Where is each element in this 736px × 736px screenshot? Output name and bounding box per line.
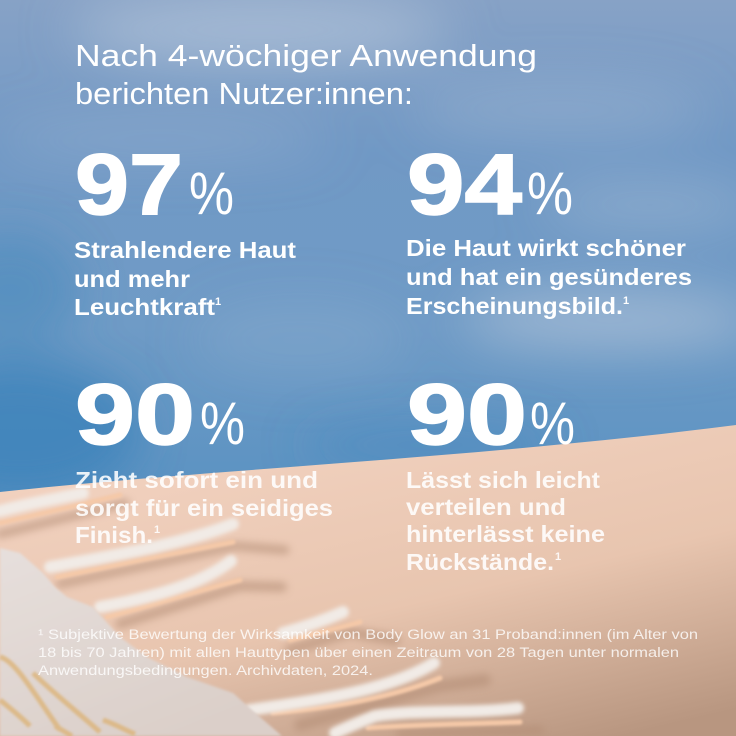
stat: 97%: % xyxy=(189,160,234,227)
background: sand xyxy=(0,425,736,736)
stat: 97%: und mehr xyxy=(74,266,190,292)
background: sky xyxy=(0,0,736,500)
stat: 94%: 94 xyxy=(407,137,522,233)
stat: 94% xyxy=(406,137,692,319)
stat: 90% right: 1 xyxy=(555,551,561,563)
stat: 90% right: 90 xyxy=(407,367,527,463)
stat: 94%: Erscheinungsbild. xyxy=(406,293,623,319)
stat: 90% left: sorgt für ein seidiges xyxy=(75,495,333,521)
stat: 90% right: hinterlässt keine xyxy=(406,521,605,547)
towel xyxy=(0,548,282,736)
stat: 90% right: verteilen und xyxy=(406,494,566,520)
heading: Nach 4-wöchiger Anwendung xyxy=(75,38,537,73)
stat: 90% left: Finish. xyxy=(75,522,153,548)
stat: 97%: 1 xyxy=(215,296,221,308)
stat: 90% left xyxy=(75,367,333,548)
stat: 90% left: % xyxy=(200,390,245,457)
footnote: 18 bis 70 Jahren) mit allen Hauttypen über einen Zeitraum von 28 Tagen unter normalen xyxy=(38,645,679,660)
stat: 97%: 97 xyxy=(75,137,183,233)
stat: 97%: Strahlendere Haut xyxy=(74,237,296,263)
towel fringe xyxy=(0,493,520,733)
stat: 94%: 1 xyxy=(623,295,629,307)
stat: 97%: Leuchtkraft xyxy=(74,294,215,320)
footnote: Anwendungsbedingungen. Archivdaten, 2024. xyxy=(38,663,373,678)
stat: 90% right: % xyxy=(530,390,575,457)
stat: 94%: Die Haut wirkt schöner xyxy=(406,235,686,261)
stat: 94%: und hat ein gesünderes xyxy=(406,264,692,290)
stat: 90% left: 90 xyxy=(75,367,195,463)
heading: berichten Nutzer:innen: xyxy=(75,76,413,111)
stat: 94%: % xyxy=(527,160,573,227)
heading xyxy=(75,38,537,111)
stat: 90% right xyxy=(406,367,605,575)
footnote xyxy=(38,627,698,678)
fringe shadows on the sand xyxy=(0,503,540,734)
stat: 90% right: Lässt sich leicht xyxy=(406,467,600,493)
stat: 90% right: Rückstände. xyxy=(406,549,554,575)
stat: 97% xyxy=(74,137,296,320)
stat: 90% left: Zieht sofort ein und xyxy=(75,467,318,493)
stat: 90% left: 1 xyxy=(154,524,160,536)
footnote: ¹ Subjektive Bewertung der Wirksamkeit von Body Glow an 31 Proband:innen (im Alter von xyxy=(38,627,698,642)
